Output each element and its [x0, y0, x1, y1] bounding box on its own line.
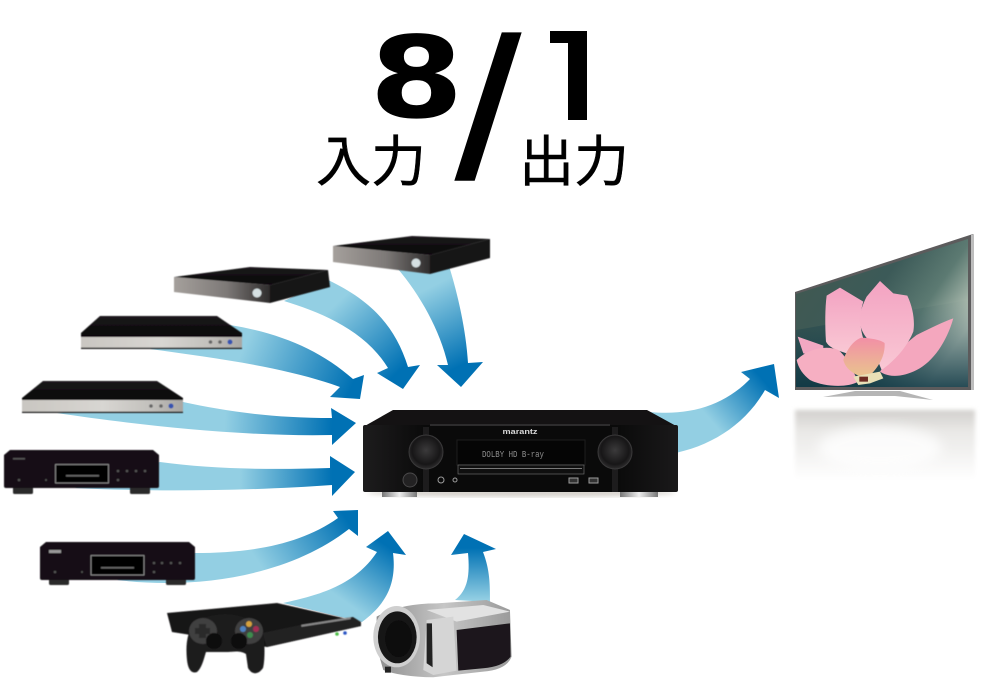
- device: top flat player: [333, 236, 490, 274]
- power button: [403, 473, 417, 487]
- input arrows: [57, 266, 496, 622]
- stand: [823, 391, 933, 400]
- button: [252, 288, 262, 298]
- top panel: [363, 410, 678, 427]
- slash: /: [455, 0, 521, 221]
- front ports: [438, 477, 598, 483]
- lotus flower: [797, 281, 953, 386]
- arrow: sixth player to receiver: [117, 510, 358, 583]
- display: [56, 464, 108, 483]
- buttons: [209, 340, 232, 344]
- display text: DOLBY HD B-ray: [482, 450, 544, 460]
- device: camcorder: [373, 600, 512, 677]
- game controller: [186, 614, 264, 673]
- label: output: 出力: [519, 131, 629, 193]
- buttons: [49, 550, 181, 573]
- front panel: [363, 425, 678, 492]
- device: AV receiver: [363, 410, 678, 497]
- brand name: marantz: [502, 429, 538, 436]
- lens: [373, 606, 420, 667]
- arrow: console to receiver: [283, 531, 406, 622]
- button: [412, 258, 420, 268]
- device: fourth slim player: [22, 381, 183, 413]
- colored buttons: [240, 621, 259, 638]
- arrow: camcorder to receiver: [451, 534, 496, 602]
- heading: 8 input / 1 output: [318, 31, 624, 186]
- arrow: top player to receiver: [398, 266, 483, 387]
- display: [457, 440, 585, 465]
- device: sixth disc player: [40, 542, 195, 585]
- device: game console with controller: [167, 603, 361, 673]
- numeral 1: [550, 31, 587, 120]
- arrow: fourth player to receiver: [57, 402, 356, 445]
- device: fifth disc player: [4, 450, 159, 494]
- left volume knob: [409, 427, 443, 492]
- output arrow: receiver to TV: [650, 364, 779, 454]
- numeral 8: 8: [369, 13, 464, 144]
- screen: [796, 239, 968, 387]
- feet: [382, 490, 658, 497]
- numeral 1: 1: [540, 6, 610, 147]
- device: third slim player: [81, 316, 242, 349]
- floor shadow: [367, 489, 675, 497]
- arrow: second player to receiver: [284, 280, 420, 389]
- frame: [795, 234, 974, 390]
- arrow: fifth player to receiver: [75, 456, 355, 496]
- device: second flat player: [174, 267, 330, 303]
- reflection: [795, 410, 975, 480]
- buttons: [13, 458, 146, 481]
- arrow: third player to receiver: [150, 325, 364, 399]
- button strip: [458, 465, 584, 474]
- device: television: [795, 234, 975, 480]
- status lights: [335, 631, 347, 636]
- display: [91, 556, 144, 575]
- right volume knob: [598, 427, 632, 492]
- label: input: 入力: [316, 131, 426, 193]
- buttons: [149, 404, 174, 408]
